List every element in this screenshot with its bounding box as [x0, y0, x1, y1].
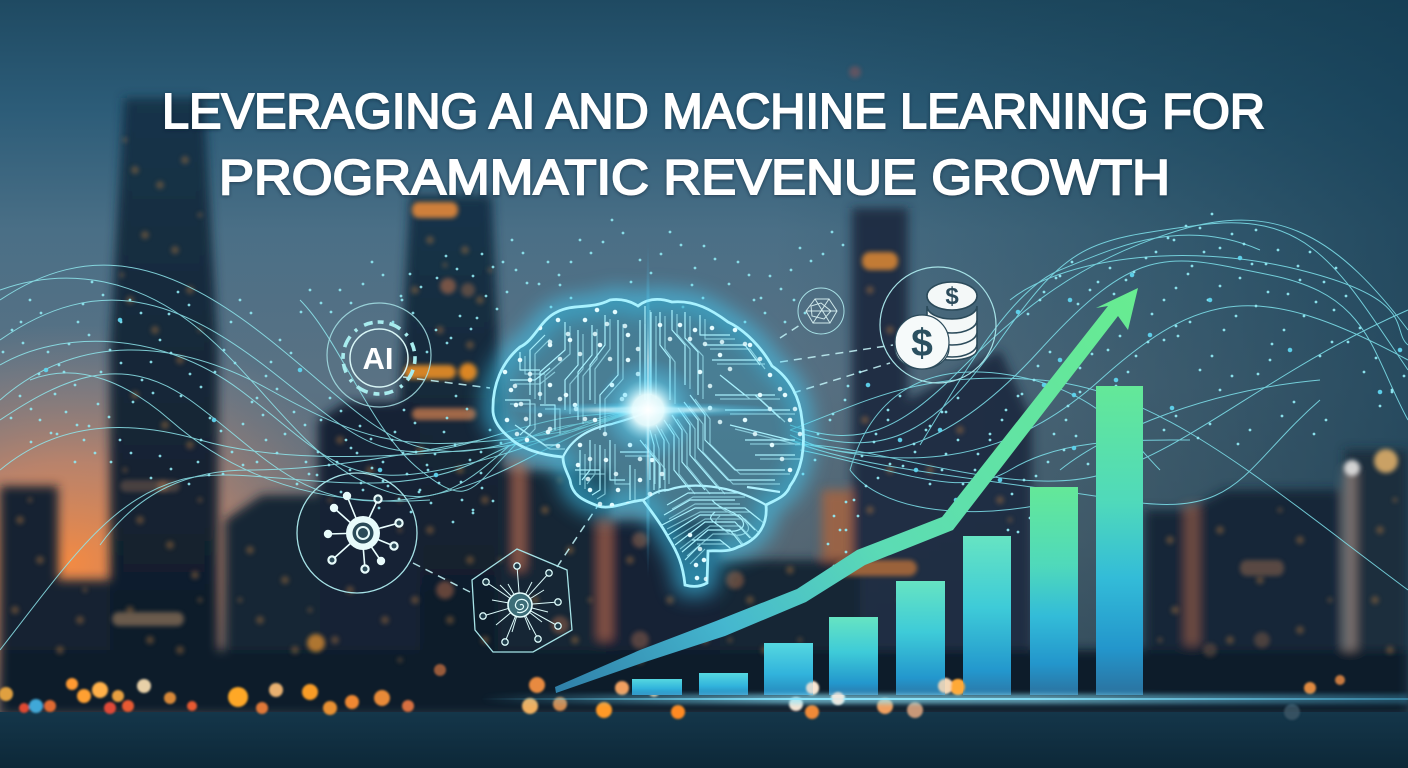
brain circuit nodes — [505, 310, 800, 592]
title — [162, 85, 1265, 205]
bar chart — [632, 386, 1143, 695]
dashed connector lines — [403, 325, 893, 592]
icon: AI badge: AI — [362, 341, 394, 376]
particle dots — [3, 214, 1404, 566]
water foreground — [0, 712, 1408, 768]
foreground bokeh over bars — [806, 679, 965, 704]
center light flare — [508, 240, 788, 580]
brain illustration — [493, 299, 804, 592]
icon: AI badge — [327, 303, 431, 407]
icon: dollar coins: $ — [945, 283, 959, 310]
icon: hexagon neural burst — [472, 549, 572, 652]
icon: dollar coins — [880, 267, 996, 383]
title: LEVERAGING AI AND MACHINE LEARNING FOR — [162, 85, 1265, 139]
icon: network hub — [297, 473, 417, 593]
title: PROGRAMMATIC REVENUE GROWTH — [219, 151, 1170, 205]
icon: small web node — [798, 288, 844, 334]
icon: dollar coins: $ — [911, 322, 933, 365]
shoreline light streak — [480, 694, 1408, 704]
brain circuit traces — [505, 306, 800, 564]
flowing data waves right — [790, 220, 1408, 590]
bokeh window texture — [15, 140, 1395, 660]
growth arrow — [555, 288, 1138, 693]
flowing data waves left — [0, 265, 640, 650]
